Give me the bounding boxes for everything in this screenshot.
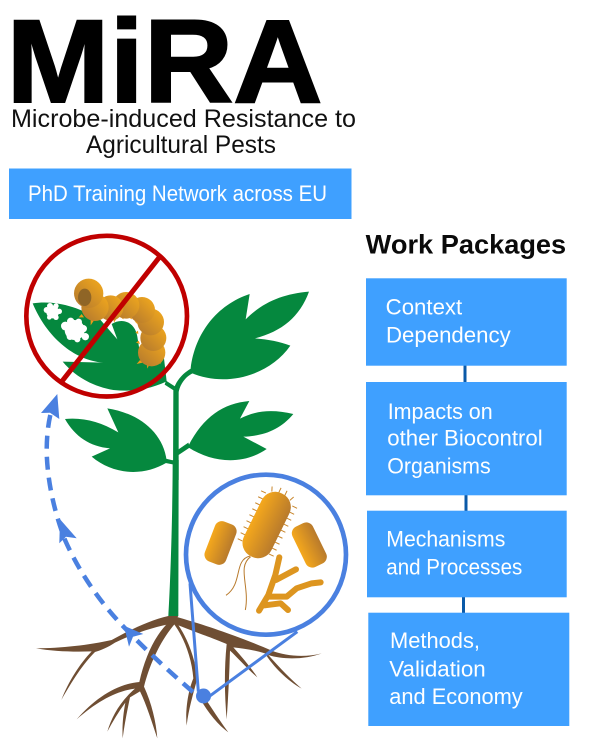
- bacterium: centre: [238, 487, 296, 563]
- leaf: middle left: [65, 408, 167, 472]
- roots: [36, 460, 322, 738]
- lens ring: [186, 475, 346, 635]
- subtitle: Agricultural Pests: [86, 131, 276, 159]
- stem base: [168, 460, 179, 616]
- dashed arrow: root to leaf signal: [41, 394, 211, 704]
- bacterium hairs: [238, 481, 302, 556]
- lens pointer lines: [190, 583, 297, 698]
- root: left main: [36, 616, 178, 700]
- bacterium: left: [202, 519, 239, 567]
- root origin dot: [196, 688, 211, 704]
- work package: Mechanisms and Processes: Mechanisms: [386, 527, 505, 552]
- work package: Impacts on other Biocontrol Organisms: other Biocontrol: [387, 426, 543, 451]
- subtitle: [11, 105, 356, 159]
- bacterium: right: [289, 520, 329, 570]
- leaf: upper right: [191, 292, 309, 379]
- microbe lens: [186, 475, 346, 698]
- branch: upper left: [165, 381, 175, 391]
- banner: PhD Training Network: [9, 168, 352, 219]
- heading: Work Packages: Work Packages: [366, 230, 566, 260]
- plant stem and leaves: [65, 292, 309, 480]
- prohibition slash: [62, 257, 159, 382]
- work package: Impacts on other Biocontrol Organisms: Impacts on: [388, 399, 493, 424]
- icon: eaten leaf with caterpillar in prohibition sign: [26, 236, 187, 396]
- root: lower tip: [200, 693, 228, 732]
- work package: Impacts on other Biocontrol Organisms: Organisms: [387, 454, 491, 479]
- flagella: [226, 556, 251, 610]
- fungal hyphae: [259, 557, 321, 611]
- arrowhead: top: [41, 394, 59, 419]
- work package: Methods, Validation and Economy: Validation: [389, 657, 486, 682]
- work package: Methods, Validation and Economy: and Economy: [389, 684, 523, 709]
- work package: Mechanisms and Processes: [367, 511, 567, 597]
- work package: Mechanisms and Processes: and Processes: [386, 555, 522, 580]
- caterpillar: [79, 314, 161, 369]
- banner: PhD Training Network: PhD Training Network across EU: [28, 181, 327, 206]
- work package: Methods, Validation and Economy: Methods,: [390, 628, 480, 653]
- arrowhead: middle: [59, 519, 77, 543]
- branch: upper right: [174, 368, 193, 392]
- work package: Impacts on other Biocontrol Organisms: [366, 382, 567, 495]
- root: centre left: [77, 622, 175, 738]
- branch: middle right: [177, 443, 190, 455]
- root: right main: [173, 616, 322, 719]
- work package: Context Dependency: Context: [386, 294, 462, 319]
- connector lines: [462, 365, 468, 614]
- stem: [173, 389, 179, 480]
- prohibition ring: [26, 236, 187, 396]
- work package: Context Dependency: Dependency: [386, 322, 511, 347]
- root: centre right: [174, 623, 197, 726]
- work package: Methods, Validation and Economy: [368, 613, 569, 726]
- leaf: eaten: [33, 303, 167, 391]
- leaf: middle right: [188, 401, 293, 460]
- arrowhead: lower: [124, 626, 143, 647]
- leaf damage spots: [44, 303, 89, 342]
- subtitle: Microbe-induced Resistance to: [11, 105, 356, 133]
- work package: Context Dependency: [366, 278, 567, 366]
- branch: middle left: [166, 459, 174, 465]
- caterpillar mouth: [78, 289, 91, 306]
